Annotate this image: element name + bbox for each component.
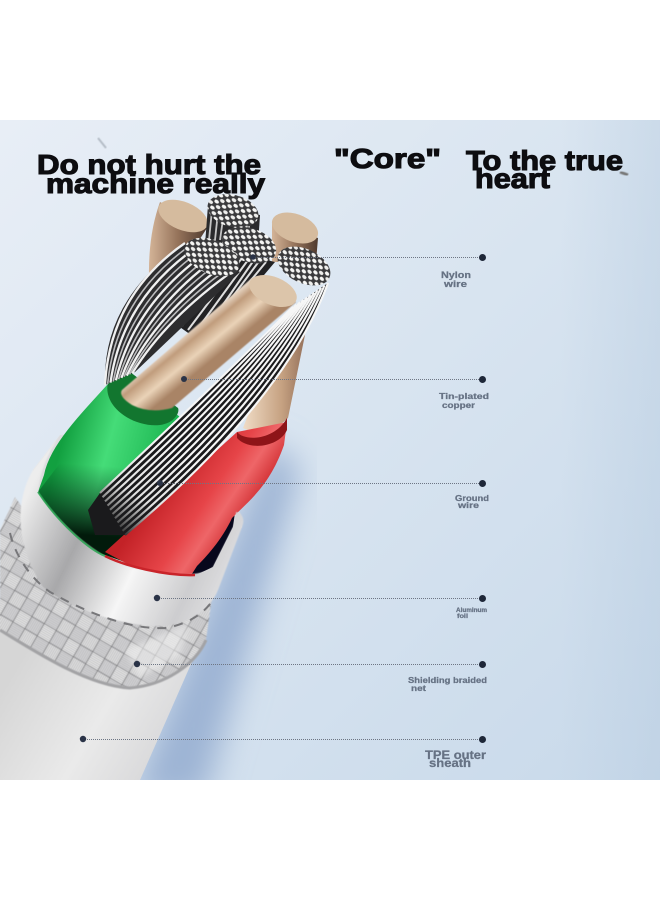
background panel — [0, 120, 660, 800]
label: Tin-plated copper: copper — [442, 400, 476, 410]
label: Nylon wire: Nylon — [441, 270, 471, 281]
label: Ground wire: wire — [457, 501, 480, 510]
red insulated wire — [105, 418, 287, 577]
leader: Nylon wire — [250, 254, 486, 261]
dark opening — [192, 515, 235, 574]
label: TPE outer sheath — [425, 748, 486, 770]
title: Do not hurt the machine really: machine really — [46, 168, 266, 199]
label: Shielding braided net: net — [411, 684, 426, 693]
metal ring front band — [10, 435, 243, 628]
heading: Core: "Core" — [334, 143, 441, 174]
heading: To the true heart: heart — [475, 163, 550, 194]
front copper wire — [121, 269, 301, 410]
back copper wire right — [272, 212, 318, 262]
label: Shielding braided net: Shielding braided — [408, 676, 487, 685]
label: Shielding braided net — [408, 676, 487, 693]
label: TPE outer sheath: TPE outer — [425, 748, 486, 762]
braided shield — [0, 497, 213, 688]
label: Tin-plated copper — [439, 391, 489, 410]
label: Aluminum foil: foil — [457, 614, 468, 620]
leader: TPE outer sheath — [80, 736, 486, 743]
label: Tin-plated copper: Tin-plated — [439, 391, 489, 401]
label: Nylon wire: wire — [443, 279, 467, 290]
left tinned strand bundle — [105, 230, 245, 385]
top tinned strand — [206, 194, 260, 244]
title: Do not hurt the machine really — [37, 149, 266, 199]
ground wire strand bundle — [88, 239, 337, 535]
outer sheath — [0, 600, 206, 780]
label: Aluminum foil: Aluminum — [456, 608, 487, 614]
leader: Ground wire — [157, 480, 486, 487]
green insulated wire — [38, 372, 190, 562]
heading: To the true heart: To the true — [466, 145, 623, 176]
label: Ground wire — [455, 494, 489, 510]
label: Nylon wire — [441, 270, 471, 290]
back copper wire left — [148, 200, 207, 273]
cable illustration — [0, 189, 337, 780]
leader: Aluminum foil — [154, 595, 486, 602]
heading: To the true heart — [466, 145, 623, 194]
copper wire from red insulation — [243, 330, 306, 432]
metal ring back — [38, 434, 242, 572]
label: Aluminum foil — [456, 608, 487, 620]
label: TPE outer sheath: sheath — [429, 756, 471, 770]
label: Ground wire: Ground — [455, 494, 489, 503]
title: Do not hurt the machine really: Do not hurt the — [37, 149, 261, 180]
centre tinned strand — [181, 226, 276, 334]
leader: Shielding braided net — [134, 661, 486, 668]
leader: Tin-plated copper — [181, 376, 486, 383]
